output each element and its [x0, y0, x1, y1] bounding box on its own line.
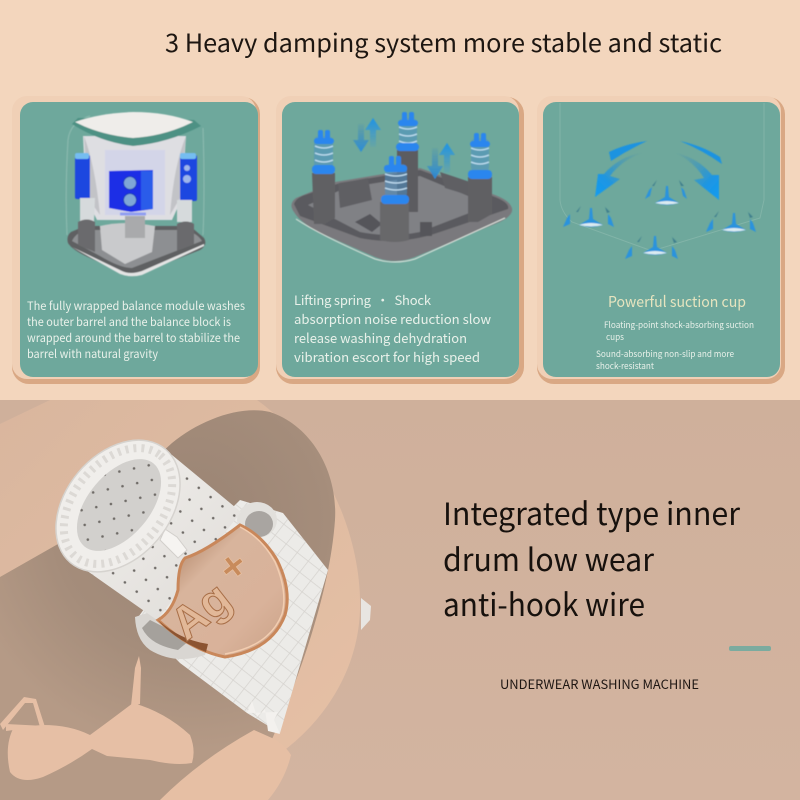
text block: lifting spring: release washing dehydration — [294, 328, 467, 347]
icon: large arrows — [595, 141, 722, 200]
heading: integrated inner drum: anti-hook wire — [443, 580, 645, 625]
panel: lifting spring — [276, 96, 524, 384]
fabric lower end — [160, 730, 291, 800]
icon: blue springs — [312, 112, 492, 204]
text block: balance module: wrapped around the barrel to stabilize the — [27, 330, 240, 346]
text block: balance module: the outer barrel and the balance block is — [27, 314, 231, 330]
panel: balance module — [12, 96, 260, 384]
text block: lifting spring: Lifting spring · Shock — [294, 290, 432, 309]
heading: integrated inner drum: Integrated type inner — [443, 489, 741, 534]
icon: Ag+ shield — [158, 525, 287, 657]
drum cylinder — [55, 439, 240, 619]
icon: Ag+ shield: + — [209, 540, 257, 592]
icon: machine with balance blocks — [66, 112, 205, 276]
text block: suction cups: cups — [606, 331, 624, 343]
icon: bra — [0, 656, 194, 780]
text block: lifting spring: absorption noise reduction slow — [294, 309, 492, 328]
heading: powerful suction cup: Powerful suction cup — [608, 291, 746, 312]
text block: lifting spring — [294, 290, 492, 366]
text block: lifting spring: vibration escort for high speed — [294, 347, 480, 366]
top background — [0, 0, 800, 400]
icon: suction cups — [563, 180, 756, 259]
text block: suction cups — [596, 319, 754, 372]
title: 3 Heavy damping system more stable and static — [165, 24, 722, 60]
text block: balance module — [27, 298, 245, 362]
heading: integrated inner drum — [443, 489, 741, 625]
icon: up down arrows — [353, 118, 455, 179]
illustration: drum and fabric — [0, 400, 371, 800]
caption: UNDERWEAR WASHING MACHINE — [500, 674, 699, 693]
icon: machine outline — [560, 103, 764, 251]
text block: balance module: barrel with natural gravity — [27, 346, 158, 362]
panel: suction cups — [537, 96, 785, 384]
heading: integrated inner drum: drum low wear — [443, 535, 655, 580]
tab — [361, 598, 371, 630]
icon: tray with springs — [291, 112, 512, 262]
bottom background — [0, 400, 800, 800]
text block: suction cups: Sound-absorbing non-slip and more — [596, 348, 734, 360]
accent bar — [729, 646, 771, 651]
text block: suction cups: Floating-point shock-absorbing suction — [604, 319, 754, 331]
icon: Ag+ shield: Ag — [160, 571, 240, 650]
dark interior — [0, 410, 335, 800]
fabric band — [0, 400, 360, 752]
text block: suction cups: shock-resistant — [596, 360, 655, 372]
drum housing — [135, 500, 328, 734]
text block: balance module: The fully wrapped balance module washes — [27, 298, 245, 314]
